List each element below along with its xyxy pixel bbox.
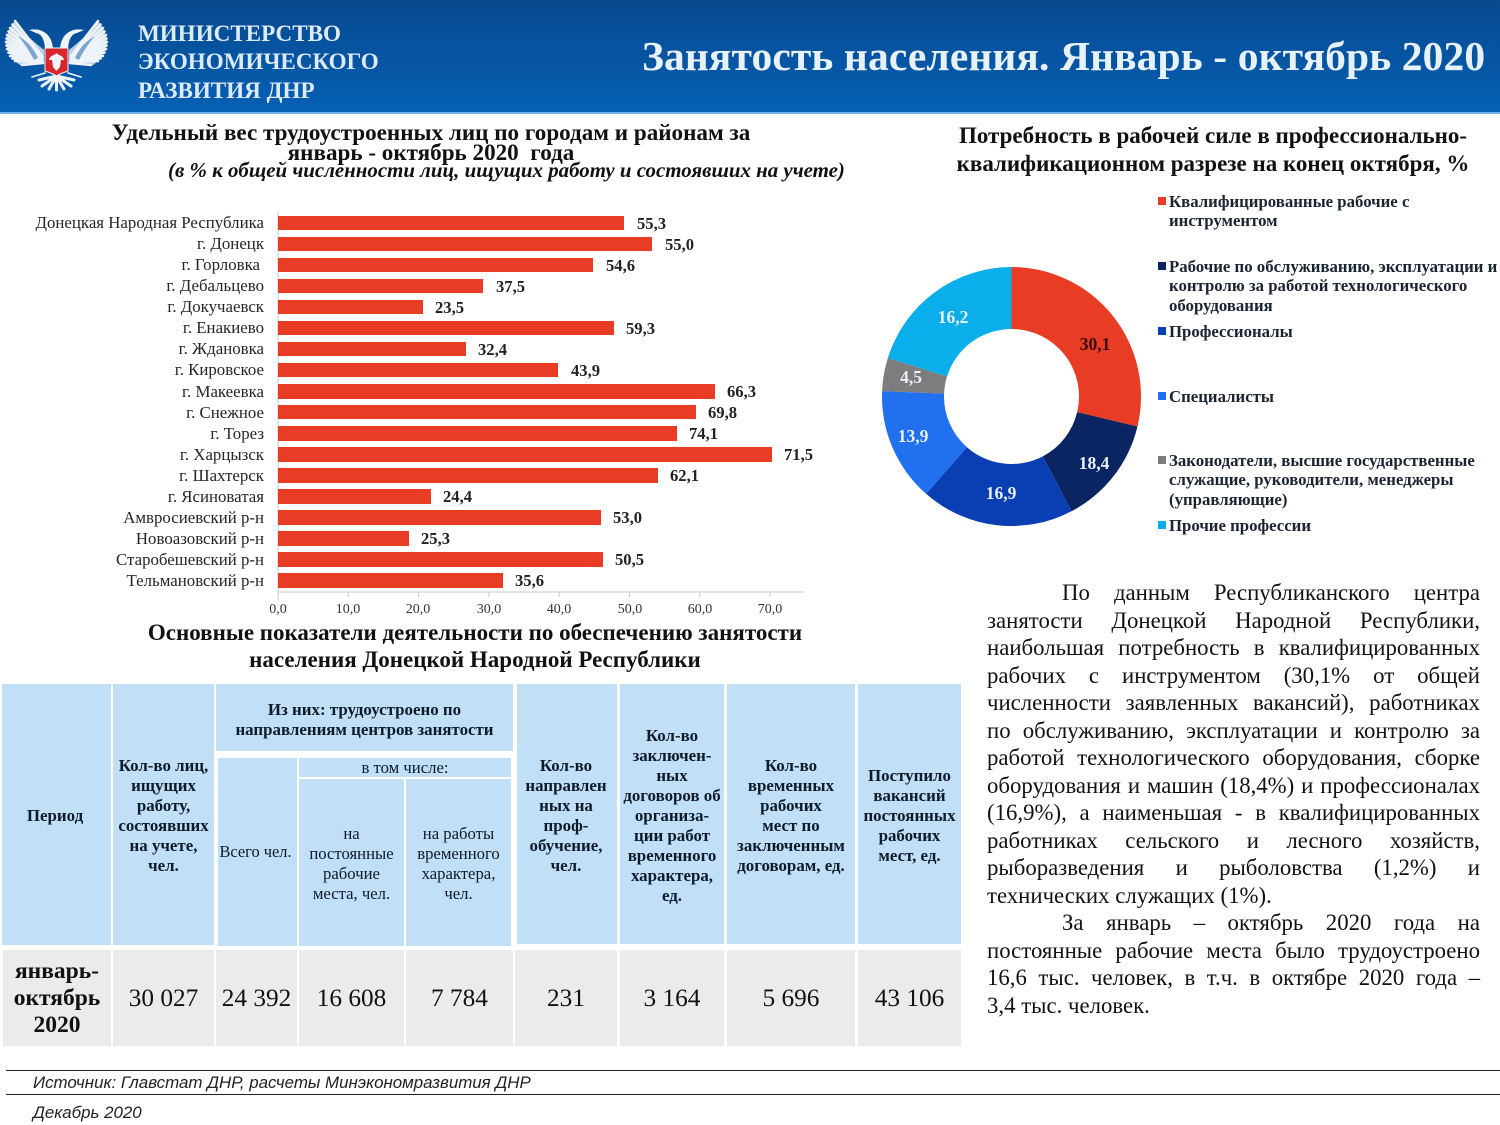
value labels: 43,9 [571,361,600,380]
data cell: 7 784 [431,984,488,1012]
value labels: 54,6 [606,256,635,275]
legend: maintenance workers: оборудования [1169,296,1273,315]
ministry name [138,20,379,103]
footer: date: Декабрь 2020 [33,1103,142,1122]
header cell: job seekers: ищущих [131,776,196,795]
donut legend [1158,192,1497,535]
category labels: Новоазовский р-н [136,529,264,548]
category labels: г. Ждановка [179,339,265,358]
header cell: total: Всего чел. [219,842,292,861]
header cell: period [2,684,111,945]
header cell: employed group: направлениям центров занятости [235,720,494,738]
category labels: г. Кировское [175,360,264,379]
header cell: contracts: договоров об [623,786,721,805]
footer: source: Источник: Главстат ДНР, расчеты Минэкономразвития ДНР [33,1073,531,1092]
header cell: job seekers: чел. [148,856,179,875]
header cell: temporary work: на работы [423,824,494,843]
header cell: permanent jobs: места, чел. [313,884,390,903]
text block: commentary: оборудования и машин (18,4%) и профессионалах [987,772,1480,798]
header cell: job seekers: Кол-во лиц, [119,756,208,775]
header cell: training: проф- [544,816,588,835]
data cell: period: январь- [15,958,99,984]
header cell: contracts: организа- [635,806,709,825]
donut value labels: 16,9 [986,483,1017,503]
main title: Занятость населения. Январь - октябрь 2020 [642,33,1485,79]
text block: commentary: По данным Республиканского центра [1062,580,1480,605]
category labels: г. Енакиево [183,318,264,337]
axis labels: 40,0 [547,602,571,617]
heading: donut chart: Потребность в рабочей силе в профессионально- [959,123,1467,148]
header cell: permanent jobs: постоянные [309,844,394,863]
data cell [858,950,961,1046]
donut value labels [898,307,1110,503]
axis labels: 30,0 [477,602,501,617]
header cell: total [218,758,297,946]
header cell: training: обучение, [530,836,602,855]
category labels: г. Дебальцево [166,276,264,295]
header cell: temporary jobs: рабочих [760,796,822,815]
header cell: employed group: Из них: трудоустроено по [268,700,461,718]
donut value labels: 18,4 [1079,453,1110,473]
header cell: training: Кол-во [540,756,592,775]
header cell: job seekers: на учете, [130,836,197,855]
value labels: 69,8 [708,403,737,422]
header cell: employed group [216,684,513,751]
value labels: 37,5 [496,277,525,296]
category labels: г. Горловка [182,255,261,274]
text block: commentary: За январь – октябрь 2020 года на [1062,910,1480,935]
legend: legislators and managers: (управляющие) [1169,490,1287,509]
text block: commentary [987,580,1480,1018]
legend: other professions: Прочие профессии [1169,516,1311,535]
text block: commentary: наибольшая потребность в квалифицированных [987,635,1480,660]
axis labels: 20,0 [406,602,430,617]
data cell [515,950,617,1046]
data cell [113,950,214,1046]
legend: maintenance workers: Рабочие по обслуживанию, эксплуатации и [1169,257,1497,276]
axis labels: 0,0 [269,602,287,617]
legend: professionals: Профессионалы [1169,322,1293,341]
category labels: г. Донецк [197,234,265,253]
header cell: training [517,684,617,944]
header cell: contracts: заключен- [632,746,712,765]
donut chart: labour demand by profession [882,267,1141,526]
value labels: 23,5 [435,298,464,317]
value labels: 35,6 [515,571,544,590]
donut value labels: 13,9 [898,426,929,446]
data cell: 30 027 [129,984,198,1012]
value labels: 62,1 [670,466,699,485]
category labels: Тельмановский р-н [127,571,264,590]
icon: coat of arms eagle [4,20,108,92]
bars [278,216,772,588]
header cell: including: в том числе: [362,758,448,776]
legend: skilled workers [1158,192,1410,230]
text block: commentary: работниках сельского и лесного хозяйств, [987,828,1480,852]
footer: source [6,1070,1500,1095]
header cell: including [299,758,511,777]
header cell: training: ных на [539,796,593,815]
header cell: job seekers [113,684,214,945]
category labels [35,213,265,590]
value labels: 59,3 [626,319,655,338]
donut value labels: 4,5 [900,367,922,387]
legend: maintenance workers: контролю за работой технологического [1169,276,1467,295]
data cell [216,950,297,1046]
text block: commentary: постоянные рабочие места было трудоустроено [987,938,1480,962]
data cell: 5 696 [763,984,819,1012]
ministry name: РАЗВИТИЯ ДНР [138,77,315,103]
heading: donut chart [957,123,1469,176]
header cell: vacancies: рабочих [879,826,940,845]
header cell: temporary jobs: Кол-во [765,756,817,775]
heading: bar chart: январь - октябрь 2020 года [288,139,574,165]
heading: bar chart: Удельный вес трудоустроенных лиц по городам и районам за [112,119,750,145]
header cell: training: чел. [551,856,581,875]
data cell: period: 2020 [33,1012,80,1038]
header cell: temporary jobs: мест по [762,816,820,835]
category labels: г. Снежное [186,403,264,422]
legend: skilled workers: Квалифицированные рабочие с [1169,192,1409,211]
header cell: permanent jobs [299,779,404,946]
header cell: vacancies: Поступило [868,766,951,785]
axis labels: 50,0 [618,602,642,617]
heading: table: Основные показатели деятельности по обеспечению занятости [148,620,802,645]
text block: commentary: 16,6 тыс. человек, в т.ч. в октябре 2020 года – [987,965,1480,990]
text block: commentary: занятости Донецкой Народной Республики, [987,608,1480,632]
data cell: 43 106 [875,984,944,1012]
legend: legislators and managers: Законодатели, высшие государственные [1169,451,1475,470]
donut value labels: 30,1 [1080,334,1110,354]
header cell: temporary work [406,779,511,946]
category labels: г. Шахтерск [179,466,265,485]
data cell: period [3,950,111,1046]
header cell: contracts: ных [656,766,688,785]
value labels [421,214,813,590]
header cell: vacancies: вакансий [873,786,946,805]
header cell: temporary work: чел. [444,884,473,903]
heading: table [148,620,802,672]
text block: commentary: рыборазведения и рыболовства (1,2%) и [987,855,1480,880]
header cell: temporary jobs: заключенным [737,836,845,855]
header cell: vacancies [858,684,961,944]
data cell [406,950,513,1046]
text block: commentary: численности заявленных вакансий), работниках [987,690,1480,715]
header cell: period: Период [27,806,83,825]
header cell: temporary jobs [727,684,855,944]
header cell: temporary jobs: договорам, ед. [737,856,845,875]
heading: bar chart [112,119,845,182]
category labels: Старобешевский р-н [116,550,264,569]
legend: skilled workers: инструментом [1169,211,1278,230]
category labels: г. Торез [210,424,264,443]
legend: maintenance workers [1158,257,1497,315]
header cell: job seekers: состоявших [118,816,209,835]
table: key employment indicators [2,684,961,1046]
data cell: 16 608 [317,984,386,1012]
header cell: temporary jobs: временных [748,776,834,795]
category labels: г. Ясиноватая [168,487,264,506]
header cell: contracts: ед. [662,886,682,905]
header cell: permanent jobs: рабочие [323,864,380,883]
legend: legislators and managers: служащие, руководители, менеджеры [1169,470,1453,489]
data cell: period: октябрь [14,984,100,1010]
header cell: temporary work: характера, [422,864,495,883]
value labels: 71,5 [784,445,813,464]
header cell: contracts [620,684,724,944]
bar chart: share of employed persons by city and district [35,211,813,617]
value labels: 24,4 [443,487,472,506]
header cell: job seekers: работу, [137,796,190,815]
header cell: contracts: характера, [631,866,713,885]
data cell [620,950,724,1046]
axis labels: 10,0 [336,602,360,617]
header cell: contracts: Кол-во [646,726,698,745]
axis labels [269,602,782,617]
donut value labels: 16,2 [938,307,968,327]
legend: legislators and managers [1158,451,1475,509]
header band [0,0,1500,114]
data cell [727,950,855,1046]
text block: commentary: (16,9%), а наименьшая - в квалифицированных [987,800,1480,825]
data cell: 24 392 [222,984,291,1012]
axis labels: 70,0 [758,602,782,617]
data cell: 231 [547,984,585,1012]
data cell: 3 164 [644,984,700,1012]
header cell: training: направлен [525,776,607,795]
text block: commentary: 3,4 тыс. человек. [987,992,1150,1018]
value labels: 55,3 [637,214,666,233]
value labels: 25,3 [421,529,450,548]
data cell [299,950,404,1046]
header cell: temporary work: временного [417,844,500,863]
header cell: vacancies: мест, ед. [878,846,941,865]
value labels: 50,5 [615,550,644,569]
value labels: 53,0 [613,508,642,527]
axis labels: 60,0 [688,602,712,617]
text block: commentary: технических служащих (1%). [987,882,1272,908]
header cell: vacancies: постоянных [863,806,956,825]
category labels: Амвросиевский р-н [123,508,264,527]
ministry name: МИНИСТЕРСТВО [138,20,341,46]
heading: donut chart: квалификационном разрезе на конец октября, % [957,151,1469,176]
category labels: г. Макеевка [182,382,265,401]
category labels: Донецкая Народная Республика [35,213,265,232]
legend: specialists: Специалисты [1169,387,1274,406]
heading: table: населения Донецкой Народной Республики [249,647,701,672]
heading: bar chart: (в % к общей численности лиц, ищущих работу и состоявших на учете) [168,158,845,182]
value labels: 32,4 [478,340,507,359]
header cell: permanent jobs: на [343,824,360,843]
text block: commentary: рабочих с инструментом (30,1% от общей [987,662,1480,688]
text block: commentary: по обслуживанию, эксплуатации и контролю за [987,718,1480,742]
value labels: 55,0 [665,235,694,254]
value labels: 66,3 [727,382,756,401]
ministry name: ЭКОНОМИЧЕСКОГО [138,48,379,74]
category labels: г. Докучаевск [167,297,265,316]
category labels: г. Харцызск [180,445,265,464]
header cell: contracts: ции работ [634,826,710,845]
value labels: 74,1 [689,424,718,443]
header cell: contracts: временного [628,846,716,865]
text block: commentary: работой технологического оборудования, сборке [987,745,1480,770]
